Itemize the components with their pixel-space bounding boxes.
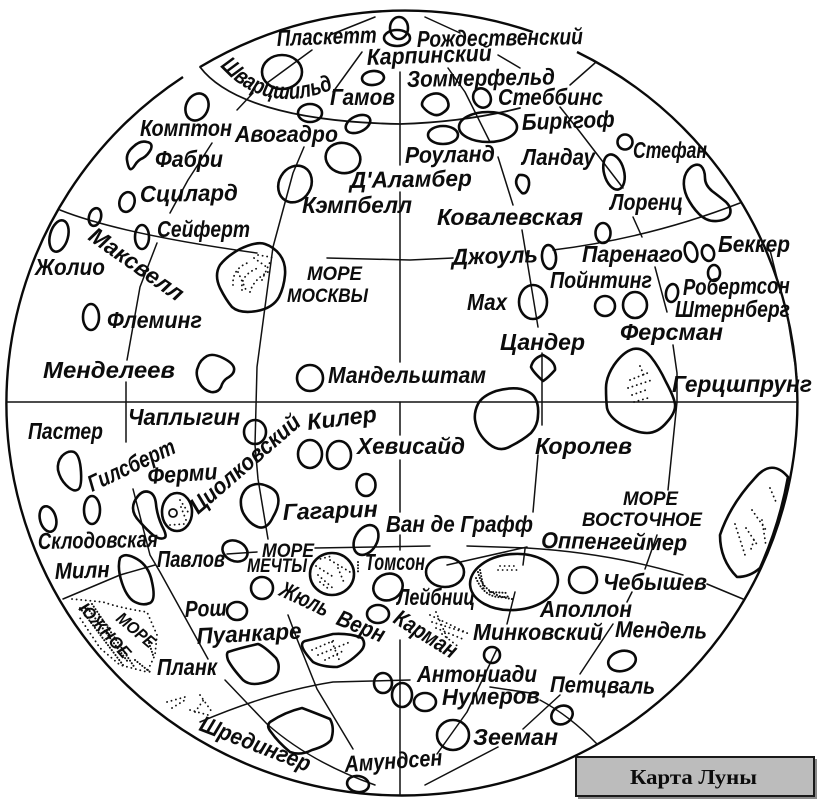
crater name labels: Лейбниц	[395, 584, 475, 610]
crater name labels: Ландау	[520, 144, 596, 170]
crater name labels: Менделеев	[43, 357, 175, 383]
dots: Планк region	[167, 695, 212, 715]
crater name labels: Джоуль	[449, 241, 538, 270]
crater name labels: Рождественский	[417, 23, 583, 52]
crater name labels: Антониади	[416, 661, 537, 687]
crater name labels: Ферсман	[620, 319, 723, 345]
crater name labels: Циолковский	[184, 409, 305, 519]
mare: Море Москвы	[217, 243, 285, 312]
crater name labels: Ферми	[147, 458, 218, 489]
dots: Карман region	[430, 612, 470, 648]
crater name labels: Сцилард	[140, 179, 238, 207]
label: МОРЕ МОСКВЫ	[287, 264, 369, 307]
crater name labels: Склодовская	[38, 526, 158, 554]
crater name labels: Максвелл	[84, 222, 189, 306]
label: МОРЕ ЮЖНОЕ: МОРЕ	[112, 609, 160, 652]
crater name labels: Мандельштам	[328, 362, 486, 388]
crater name labels: Чаплыгин	[128, 404, 240, 430]
crater name labels: Мендель	[615, 616, 707, 644]
crater name labels: Жолио	[34, 254, 105, 280]
label: МОРЕ ЮЖНОЕ: ЮЖНОЕ	[75, 599, 135, 663]
crater name labels: Жюль	[275, 576, 334, 622]
crater name labels: Флеминг	[107, 307, 202, 333]
crater name labels: Петцваль	[550, 671, 655, 699]
crater name labels: Цандер	[500, 329, 585, 355]
crater name labels: Комптон	[140, 115, 232, 141]
crater name labels: Зоммерфельд	[407, 63, 555, 92]
crater name labels: Пласкетт	[276, 22, 377, 51]
crater name labels: Кэмпбелл	[302, 192, 412, 218]
crater name labels: Авогадро	[234, 121, 338, 147]
crater name labels: Оппенгеймер	[541, 527, 687, 556]
crater name labels: Паренаго	[582, 241, 683, 267]
label: МОРЕ ВОСТОЧНОЕ: МОРЕ	[623, 489, 679, 510]
label: МОРЕ ВОСТОЧНОЕ: ВОСТОЧНОЕ	[582, 510, 703, 531]
crater name labels: Герцшпрунг	[672, 371, 812, 397]
crater name labels: Гамов	[330, 84, 395, 110]
crater name labels: Биркгоф	[521, 106, 615, 135]
title box: Карта Луны	[576, 757, 817, 799]
crater name labels: Килер	[305, 401, 378, 435]
mare: Море Южное dots	[72, 599, 157, 672]
crater name labels: Пойнтинг	[550, 267, 652, 293]
mare: Море Мечты	[310, 553, 358, 595]
mare: Море Жюля Верна	[302, 634, 364, 667]
crater name labels: Ковалевская	[437, 204, 583, 230]
crater name labels: Аполлон	[539, 596, 632, 622]
crater name labels: Карпинский	[366, 40, 492, 70]
mare: Аполлон	[468, 551, 560, 613]
crater name labels: Пастер	[28, 418, 103, 444]
crater name labels: Королев	[535, 433, 632, 459]
crater name labels: Робертсон	[683, 272, 790, 300]
crater name labels: Пуанкаре	[196, 618, 302, 649]
crater name labels: Павлов	[157, 546, 225, 572]
label: МОРЕ МЕЧТЫ	[247, 541, 315, 577]
label: МОРЕ ВОСТОЧНОЕ	[582, 489, 703, 531]
crater: Герцшпрунг	[606, 349, 675, 433]
label: МОРЕ МЕЧТЫ: МЕЧТЫ	[247, 556, 308, 577]
crater name labels: Мах	[467, 289, 508, 315]
crater name labels: Шредингер	[196, 710, 315, 777]
crater name labels: Зееман	[473, 724, 558, 750]
crater name labels: Гагарин	[282, 496, 378, 525]
crater name labels: Томсон	[365, 549, 425, 575]
crater name labels: Хевисайд	[355, 433, 465, 459]
crater name labels: Сейферт	[157, 216, 250, 242]
curve guide for Шварцшильд label	[220, 66, 336, 99]
crater name labels: Штернберг	[675, 296, 790, 322]
crater name labels: Лоренц	[608, 189, 683, 215]
crater name labels: Роуланд	[405, 140, 495, 168]
title box: Карта Луны: Карта Луны	[630, 765, 757, 789]
crater name labels: Фабри	[155, 146, 223, 172]
mare: Восточное	[720, 468, 788, 577]
label: МОРЕ МОСКВЫ: МОСКВЫ	[287, 286, 369, 307]
crater name labels: Милн	[54, 556, 110, 584]
label: МОРЕ МЕЧТЫ: МОРЕ	[262, 541, 315, 562]
crater name labels: Д'Аламбер	[348, 165, 472, 193]
crater name labels: Планк	[157, 654, 218, 680]
crater name labels: Амундсен	[343, 744, 443, 777]
crater name labels: Ван де Графф	[386, 511, 533, 537]
crater name labels: Гилсберт	[83, 433, 179, 497]
crater name labels: Чебышев	[603, 569, 707, 595]
crater name labels: Стеббинс	[498, 84, 603, 110]
crater name labels: Верн	[333, 605, 389, 647]
crater name labels: Карман	[389, 604, 463, 663]
label: МОРЕ МОСКВЫ: МОРЕ	[307, 264, 363, 285]
crater name labels: Беккер	[718, 231, 790, 257]
crater name labels: Стефан	[633, 137, 707, 163]
crater name labels: Шварцшильд	[220, 57, 331, 102]
crater: Циолковский	[162, 493, 192, 531]
crater name labels: Нумеров	[442, 682, 540, 710]
crater name labels: Рош	[184, 595, 228, 622]
crater name labels: Минковский	[473, 619, 603, 645]
